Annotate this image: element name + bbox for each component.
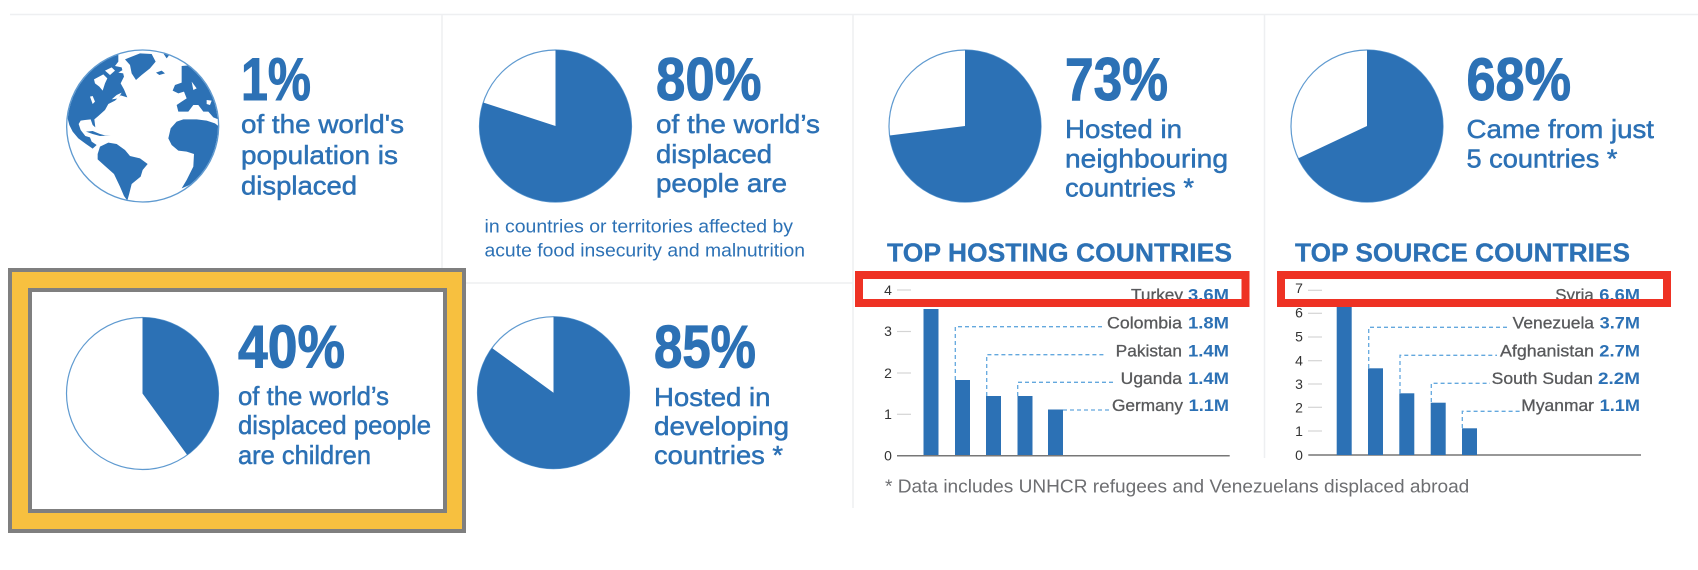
label: of the world's displaced people are: of the world’s <box>656 109 820 139</box>
labels: Uganda <box>1121 369 1183 388</box>
y axis: 2 <box>1295 400 1303 416</box>
labels <box>1492 286 1640 415</box>
y axis: 7 <box>1295 280 1303 296</box>
bars <box>1337 300 1477 455</box>
label: of the world's displaced people are children: displaced people <box>238 410 431 440</box>
pie: 80% <box>479 50 632 202</box>
y axis: 1 <box>884 406 892 422</box>
labels: 1.1M <box>1189 396 1229 415</box>
labels: 2.7M <box>1599 341 1640 360</box>
labels: 1.4M <box>1188 369 1229 388</box>
labels: Colombia <box>1107 314 1183 333</box>
heading: top hosting countries: TOP HOSTING COUNTRIES <box>887 238 1232 268</box>
y axis <box>1295 280 1641 463</box>
labels: 3.6M <box>1188 286 1229 305</box>
bar chart: top hosting countries <box>884 282 1230 464</box>
labels: Germany <box>1112 396 1183 415</box>
pie: 68% <box>1291 50 1443 202</box>
labels <box>1107 286 1229 415</box>
y axis: 0 <box>884 448 892 464</box>
labels: Pakistan <box>1116 341 1182 360</box>
text: in countries or territories <box>484 217 805 261</box>
leader lines <box>955 327 1113 410</box>
y axis: 2 <box>884 365 892 381</box>
labels: Venezuela <box>1513 314 1595 333</box>
label: Came from just 5 countries: 5 countries * <box>1466 144 1618 174</box>
y axis: 1 <box>1295 423 1303 439</box>
y axis: 4 <box>1295 353 1303 369</box>
panel: 85% developing countries <box>477 314 789 470</box>
stat: 80%: 80% <box>656 46 762 113</box>
labels: 2.2M <box>1598 369 1640 388</box>
label: of the world's displaced people are <box>656 109 820 198</box>
stat: 1%: 1% <box>241 46 311 113</box>
label: Came from just 5 countries <box>1466 114 1655 174</box>
labels: 6.6M <box>1599 286 1640 305</box>
label: of the world's displaced people are: people are <box>656 168 787 198</box>
pie: 40% <box>66 317 219 470</box>
labels: Afghanistan <box>1500 341 1594 360</box>
panel: highlighted 40% children <box>10 270 464 531</box>
pie: 85% <box>477 317 630 469</box>
stat: 85%: 85% <box>654 314 756 381</box>
text: in countries or territories: in countries or territories affected by <box>484 217 793 237</box>
label: of the world's population is displaced: of the world's <box>241 109 404 139</box>
label: of the world's population is displaced <box>241 109 404 200</box>
label: Hosted in developing countries: countries * <box>654 440 783 470</box>
highlight frame <box>10 270 464 531</box>
callout: red box hosting <box>859 275 1246 303</box>
y axis: 4 <box>884 282 892 298</box>
labels: 3.7M <box>1600 314 1640 333</box>
y axis <box>884 282 1230 464</box>
label: Hosted in developing countries: developing <box>654 411 789 441</box>
leader lines <box>1369 327 1521 428</box>
label: Hosted in developing countries <box>654 382 789 470</box>
label: of the world's displaced people are children: of the world’s <box>238 381 389 411</box>
callout: red box source <box>1281 275 1667 303</box>
y axis: 5 <box>1295 329 1303 345</box>
stat: 68%: 68% <box>1466 46 1571 113</box>
y axis: 6 <box>1295 305 1303 321</box>
label: of the world's population is displaced: population is <box>241 140 398 170</box>
label: of the world's displaced people are: displaced <box>656 139 772 169</box>
label: Hosted in neighbouring countries <box>1065 114 1228 203</box>
y axis: 0 <box>1295 447 1303 463</box>
panel: 1% of population <box>60 46 404 202</box>
panel: 73% neighbouring countries <box>889 46 1228 203</box>
label: of the world's population is displaced: displaced <box>241 170 357 200</box>
bar chart: top source countries <box>1295 280 1641 463</box>
label: Hosted in neighbouring countries: neighbouring <box>1065 144 1228 174</box>
heading: top source countries: TOP SOURCE COUNTRIES <box>1295 238 1630 268</box>
labels: Turkey <box>1131 286 1184 305</box>
labels: 1.4M <box>1188 341 1229 360</box>
bars <box>924 309 1063 455</box>
text: in countries or territories: acute food insecurity and malnutrition <box>484 241 805 261</box>
label: Hosted in neighbouring countries: Hosted in <box>1065 114 1182 144</box>
label: of the world's displaced people are children: are children <box>238 440 371 470</box>
stat: 73%: 73% <box>1065 46 1168 113</box>
pie: 73% <box>889 50 1041 202</box>
labels: South Sudan <box>1492 369 1593 388</box>
y axis: 3 <box>884 323 892 339</box>
labels: 1.8M <box>1188 314 1229 333</box>
icon: globe <box>60 50 223 202</box>
labels: Syria <box>1555 286 1594 305</box>
footnote: * Data includes UNHCR refugees and Venezuelans displaced abroad <box>885 476 1469 496</box>
y axis: 3 <box>1295 376 1303 392</box>
label: Came from just 5 countries: Came from just <box>1466 114 1655 144</box>
labels: Myanmar <box>1521 396 1594 415</box>
labels: 1.1M <box>1600 396 1640 415</box>
label: Hosted in developing countries: Hosted in <box>654 382 770 412</box>
stat: 40%: 40% <box>238 314 345 381</box>
label: of the world's displaced people are children <box>238 381 431 470</box>
panel: 68% from 5 countries <box>1291 46 1655 202</box>
label: Hosted in neighbouring countries: countries * <box>1065 173 1194 203</box>
panel: 80% food insecurity <box>479 46 820 261</box>
